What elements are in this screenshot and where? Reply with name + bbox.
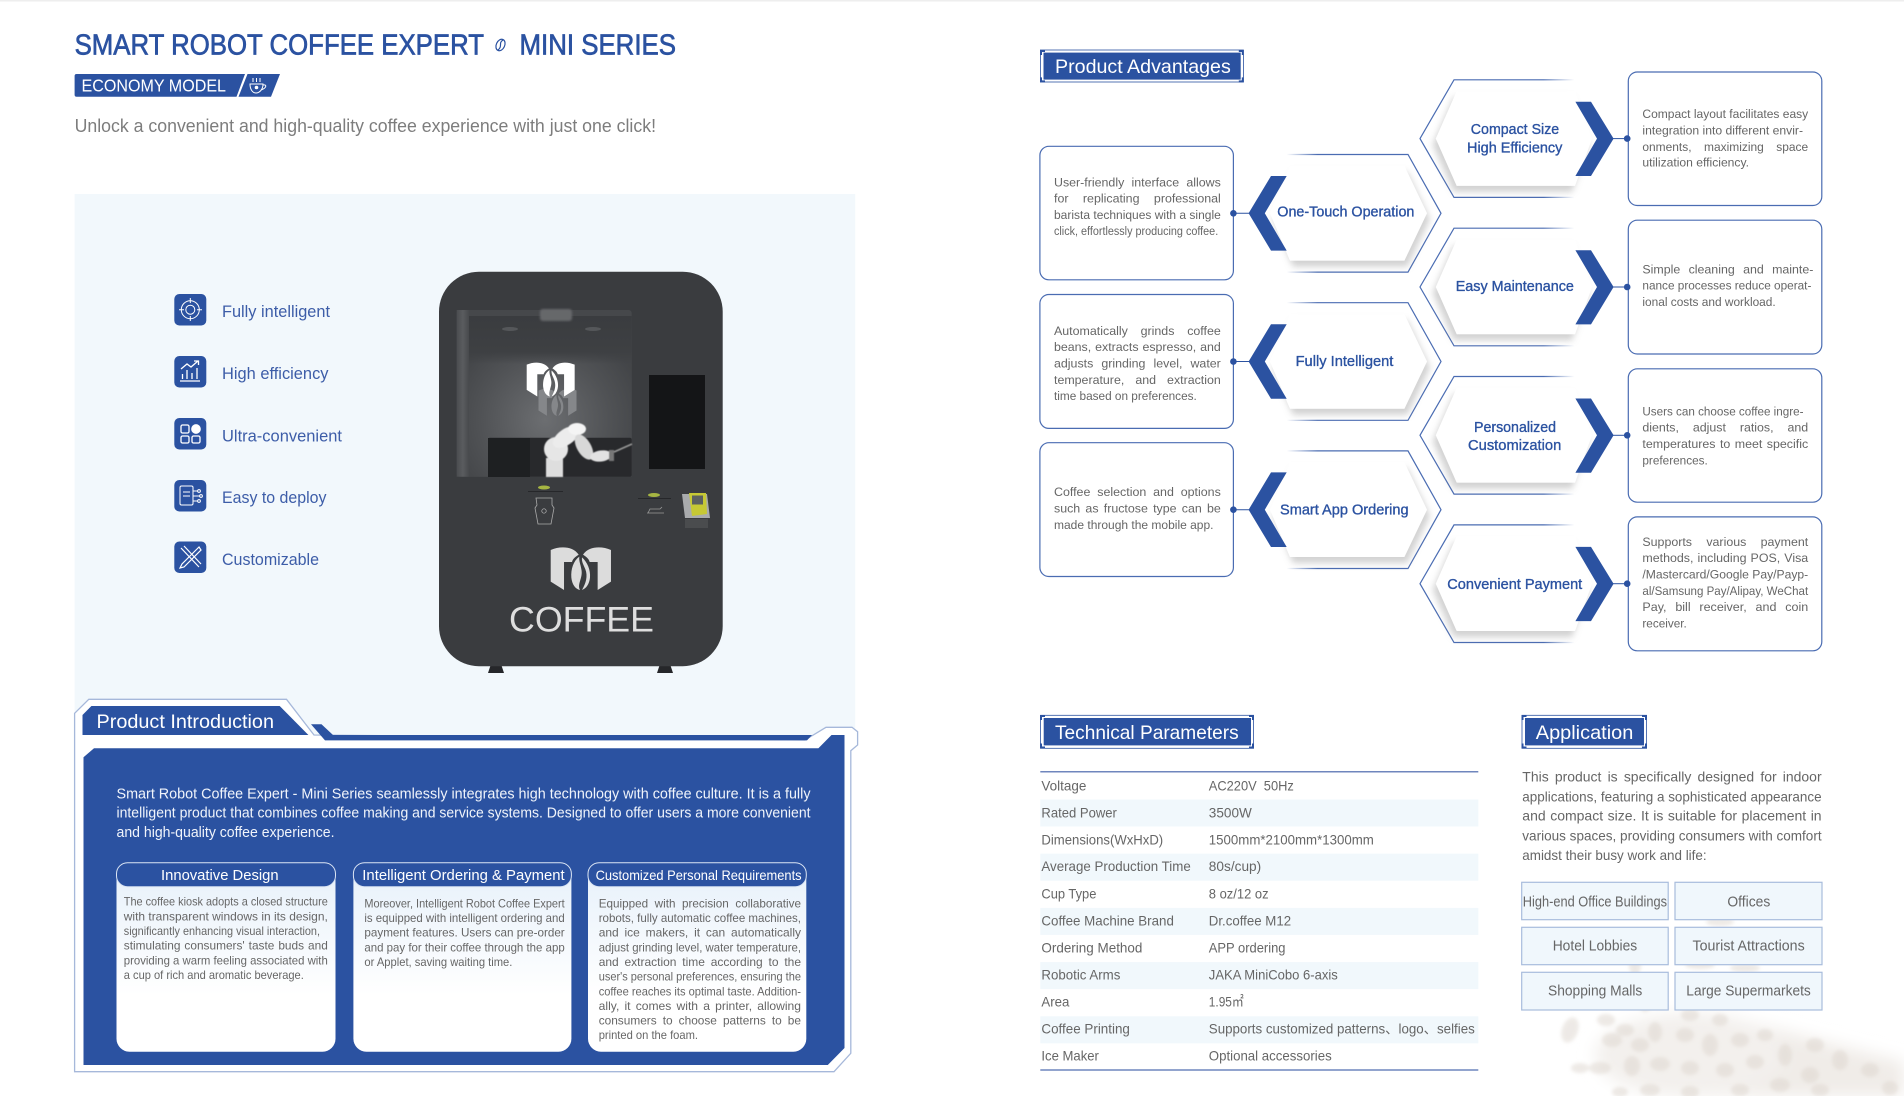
- venue: hotel lobbies: Hotel Lobbies: [1553, 939, 1637, 955]
- kiosk logo: [551, 547, 611, 590]
- description card: [1040, 443, 1233, 576]
- description card: such as fructose type can be: [1054, 501, 1221, 515]
- logo white: [527, 363, 575, 396]
- intro text: Smart Robot Coffee Expert - Mini Series seamlessly integrates high technology with coffee culture. It is a fully: [116, 786, 811, 802]
- feature: easy to deploy: Easy to deploy: [222, 489, 327, 507]
- description card: Pay, bill receiver, and coin: [1642, 600, 1808, 614]
- card: intelligent ordering and payment: payment features. Users can pre-order: [364, 926, 565, 940]
- heading: product advantages: Product Advantages: [1055, 56, 1231, 78]
- heading: product advantages: [1040, 50, 1244, 82]
- card: innovative design: a cup of rich and aromatic beverage.: [124, 968, 304, 982]
- venue: high-end office buildings: [1522, 882, 1668, 920]
- card: customized personal requirements: printed on the foam.: [599, 1028, 698, 1042]
- card: customized personal requirements: user's personal preferences, ensuring the: [599, 970, 801, 984]
- badge: economy model: [75, 74, 280, 97]
- venue: hotel lobbies: [1522, 927, 1668, 965]
- card: customized personal requirements: adjust grinding level, water temperature,: [599, 940, 801, 954]
- description card: al/Samsung Pay/Alipay, WeChat: [1642, 584, 1809, 598]
- description card: temperature, and extraction: [1054, 373, 1221, 387]
- advantage: easy maintenance: Easy Maintenance: [1456, 278, 1574, 295]
- intro text: intelligent product that combines coffee making and service systems. Designed to offer users a more convenient: [116, 806, 810, 822]
- advantage: compact size high efficiency: High Efficiency: [1467, 139, 1563, 156]
- table: technical parameters: 8 oz/12 oz: [1209, 885, 1269, 901]
- description card: for replicating professional: [1054, 192, 1221, 206]
- card: innovative design: providing a warm feeling associated with: [124, 953, 328, 967]
- subtitle: Unlock a convenient and high-quality coffee experience with just one click!: [75, 115, 656, 136]
- table: technical parameters: Voltage: [1041, 778, 1087, 794]
- feature: easy to deploy: [174, 480, 327, 512]
- application text: and compact size. It is suitable for placement in: [1522, 808, 1822, 824]
- card: intelligent ordering and payment: is equipped with intelligent ordering and: [364, 911, 565, 925]
- table: technical parameters: JAKA MiniCobo 6-axis: [1209, 966, 1338, 982]
- venue: large supermarkets: Large Supermarkets: [1686, 984, 1811, 1000]
- card: intelligent ordering and payment: Intelligent Ordering & Payment: [362, 867, 566, 884]
- advantage: fully intelligent: [1040, 294, 1441, 428]
- card: customized personal requirements: and extraction time according to the: [599, 955, 801, 969]
- table: technical parameters: Average Production Time: [1041, 858, 1191, 874]
- description card: nance processes reduce operat-: [1642, 279, 1811, 293]
- hexagon and chevron: [1420, 376, 1630, 494]
- description card: adjusts grinding level, water: [1054, 357, 1221, 371]
- description card: [1628, 517, 1822, 651]
- card: customized personal requirements: Customized Personal Requirements: [596, 867, 802, 883]
- card: innovative design: with transparent windows in its design,: [123, 909, 328, 923]
- table: technical parameters: Supports customized patterns、logo、selfies: [1209, 1020, 1475, 1036]
- description card: made through the mobile app.: [1054, 518, 1214, 532]
- advantage: one-touch operation: One-Touch Operation: [1277, 204, 1414, 221]
- card: customized personal requirements: [588, 863, 806, 1052]
- description card: dients, adjust ratios, and: [1642, 421, 1808, 435]
- table: technical parameters: 1.95㎡: [1209, 993, 1244, 1009]
- feature: customizable: [174, 542, 319, 573]
- advantage: smart app ordering: Smart App Ordering: [1280, 502, 1409, 518]
- advantage: one-touch operation: [1040, 146, 1441, 280]
- description card: barista techniques with a single: [1054, 208, 1221, 222]
- card: customized personal requirements: consumers to choose patterns to be: [599, 1014, 801, 1028]
- table: technical parameters: Cup Type: [1041, 885, 1097, 901]
- payment terminal: [682, 493, 710, 528]
- application venues: [1522, 882, 1822, 1010]
- description card: preferences.: [1642, 453, 1708, 467]
- advantage: personalized customization: Customization: [1468, 437, 1561, 454]
- feature: ultra-convenient: [174, 418, 342, 450]
- card: intelligent ordering and payment: or Applet, saving waiting time.: [364, 955, 512, 969]
- application text: various spaces, providing consumers with comfort: [1522, 827, 1822, 843]
- table: technical parameters: Rated Power: [1041, 804, 1117, 820]
- intro text: and high-quality coffee experience.: [116, 825, 334, 841]
- description card: Compact layout facilitates easy: [1642, 107, 1809, 121]
- advantage: personalized customization: Personalized: [1474, 419, 1556, 436]
- description card: time based on preferences.: [1054, 389, 1197, 403]
- card: customized personal requirements: robots, fully automatic coffee machines,: [599, 911, 801, 925]
- advantage: convenient payment: Convenient Payment: [1447, 576, 1583, 593]
- venue: shopping malls: [1522, 972, 1668, 1010]
- description card: beans, extracts espresso, and: [1054, 340, 1221, 354]
- description card: temperatures to meet specific: [1642, 437, 1808, 451]
- description card: Coffee selection and options: [1054, 485, 1221, 499]
- hexagon and chevron: [1230, 303, 1441, 420]
- feature: ultra-convenient: Ultra-convenient: [222, 428, 342, 446]
- description card: onments, maximizing space: [1642, 140, 1808, 154]
- table: technical parameters: Optional accessories: [1209, 1047, 1332, 1063]
- hexagon and chevron: [1230, 451, 1441, 568]
- table: technical parameters: Coffee Machine Brand: [1041, 912, 1174, 928]
- hexagon and chevron: [1420, 80, 1630, 197]
- card: innovative design: The coffee kiosk adopts a closed structure: [124, 895, 328, 909]
- hexagon and chevron: [1420, 525, 1630, 642]
- kiosk body: [439, 272, 723, 666]
- intro text: [116, 786, 811, 841]
- feature: fully intelligent: [174, 294, 330, 326]
- feature: fully intelligent: Fully intelligent: [222, 303, 330, 321]
- table: technical parameters: 1500mm*2100mm*1300mm: [1209, 831, 1374, 847]
- description card: receiver.: [1642, 617, 1687, 631]
- receipt outlet: [638, 493, 671, 513]
- description card: [1040, 294, 1233, 428]
- panel outline: [75, 699, 858, 1072]
- advantage: easy maintenance: [1420, 220, 1822, 354]
- card: innovative design: significantly enhancing visual interaction,: [124, 924, 320, 938]
- advantage: compact size high efficiency: Compact Size: [1471, 121, 1559, 138]
- panel: product introduction: [75, 699, 858, 1072]
- heading: application: Application: [1536, 722, 1633, 744]
- table: technical parameters: 80s/cup): [1209, 858, 1261, 874]
- card: intelligent ordering and payment: Moreover, Intelligent Robot Coffee Expert: [364, 896, 565, 910]
- logo reflection: [538, 389, 577, 416]
- application text: [1522, 769, 1822, 863]
- description card: methods, including POS, Visa: [1642, 551, 1808, 565]
- kiosk screen: [649, 375, 705, 469]
- table: technical parameters: Area: [1041, 993, 1070, 1009]
- description card: Simple cleaning and mainte-: [1642, 262, 1813, 276]
- venue: offices: [1675, 882, 1822, 920]
- venue: shopping malls: Shopping Malls: [1548, 984, 1642, 1000]
- panel body: [84, 735, 844, 1065]
- description card: [1628, 369, 1822, 502]
- description card: ional costs and workload.: [1642, 295, 1776, 309]
- venue: high-end office buildings: High-end Office Buildings: [1523, 895, 1667, 911]
- cup outlet: [528, 486, 563, 524]
- application text: This product is specifically designed for indoor: [1522, 769, 1822, 785]
- heading tab: Product Introduction: [96, 712, 274, 733]
- feature: high efficiency: High efficiency: [222, 365, 329, 383]
- table: technical parameters: AC220V 50Hz: [1209, 778, 1294, 794]
- table: technical parameters: Dr.coffee M12: [1209, 912, 1291, 928]
- hexagon and chevron: [1420, 228, 1630, 346]
- card: innovative design: [116, 863, 336, 1052]
- venue: offices: Offices: [1727, 895, 1770, 911]
- kiosk feet: [488, 664, 673, 673]
- card: customized personal requirements: coffee reaches its optimal taste. Addition-: [599, 984, 801, 998]
- table: technical parameters: Ordering Method: [1041, 939, 1142, 955]
- table: technical parameters: APP ordering: [1209, 939, 1286, 955]
- description card: utilization efficiency.: [1642, 156, 1749, 170]
- product: coffee kiosk: [439, 272, 723, 673]
- card: innovative design: Innovative Design: [161, 867, 279, 884]
- table: technical parameters: Coffee Printing: [1041, 1020, 1130, 1036]
- description card: Users can choose coffee ingre-: [1642, 404, 1804, 418]
- hexagon and chevron: [1230, 154, 1441, 272]
- application text: applications, featuring a sophisticated appearance: [1522, 788, 1822, 804]
- advantage: fully intelligent: Fully Intelligent: [1296, 353, 1394, 370]
- kiosk brand text: COFFEE: [509, 600, 654, 640]
- heading: technical parameters: Technical Parameters: [1055, 722, 1239, 744]
- venue: large supermarkets: [1675, 972, 1822, 1010]
- description card: click, effortlessly producing coffee.: [1054, 224, 1218, 238]
- card: customized personal requirements: Equipped with precision collaborative: [599, 896, 801, 910]
- robot arm: [544, 422, 632, 477]
- table: technical parameters: 3500W: [1209, 804, 1253, 820]
- title: MINI SERIES: [520, 30, 676, 62]
- card: customized personal requirements: ally, it comes with a printer, allowing: [599, 999, 801, 1013]
- icon: coffee cup: [250, 78, 266, 93]
- card: innovative design: stimulating consumers' taste buds and: [124, 939, 328, 953]
- icon: coffee bean: [494, 38, 507, 52]
- feature: customizable: Customizable: [222, 551, 319, 569]
- description card: [1628, 220, 1822, 354]
- table: technical parameters: Robotic Arms: [1041, 966, 1120, 982]
- advantage: convenient payment: [1420, 517, 1822, 651]
- feature list: [174, 294, 342, 573]
- table: technical parameters: [1040, 772, 1478, 1070]
- panel: product visual: [75, 194, 855, 735]
- description card: User-friendly interface allows: [1054, 175, 1221, 189]
- card: intelligent ordering and payment: [353, 863, 571, 1052]
- advantage: compact size high efficiency: [1420, 72, 1822, 206]
- description card: Supports various payment: [1642, 535, 1809, 549]
- feature: high efficiency: [174, 356, 329, 388]
- badge: economy model: ECONOMY MODEL: [82, 76, 226, 96]
- application text: amidst their busy work and life:: [1522, 847, 1707, 863]
- description card: /Mastercard/Google Pay/Payp-: [1642, 568, 1808, 582]
- background: coffee beans: [1558, 918, 1904, 1096]
- description card: Automatically grinds coffee: [1054, 324, 1221, 338]
- card: intelligent ordering and payment: and pay for their coffee through the app: [364, 940, 565, 954]
- venue: tourist attractions: [1675, 927, 1822, 965]
- advantage: personalized customization: [1420, 369, 1822, 502]
- card: customized personal requirements: and ice makers, it can automatically: [599, 926, 801, 940]
- description card: [1040, 146, 1233, 280]
- venue: tourist attractions: Tourist Attractions: [1692, 939, 1805, 955]
- table: technical parameters: Ice Maker: [1041, 1047, 1099, 1063]
- description card: integration into different envir-: [1642, 124, 1803, 138]
- table: technical parameters: Dimensions(WxHxD): [1041, 831, 1163, 847]
- kiosk window: [457, 309, 632, 477]
- heading: technical parameters: [1040, 715, 1254, 748]
- heading: application: [1522, 715, 1647, 748]
- description card: [1628, 72, 1822, 206]
- heading tab: [82, 706, 812, 740]
- advantage: smart app ordering: [1040, 443, 1441, 576]
- title: SMART ROBOT COFFEE EXPERT: [75, 30, 484, 62]
